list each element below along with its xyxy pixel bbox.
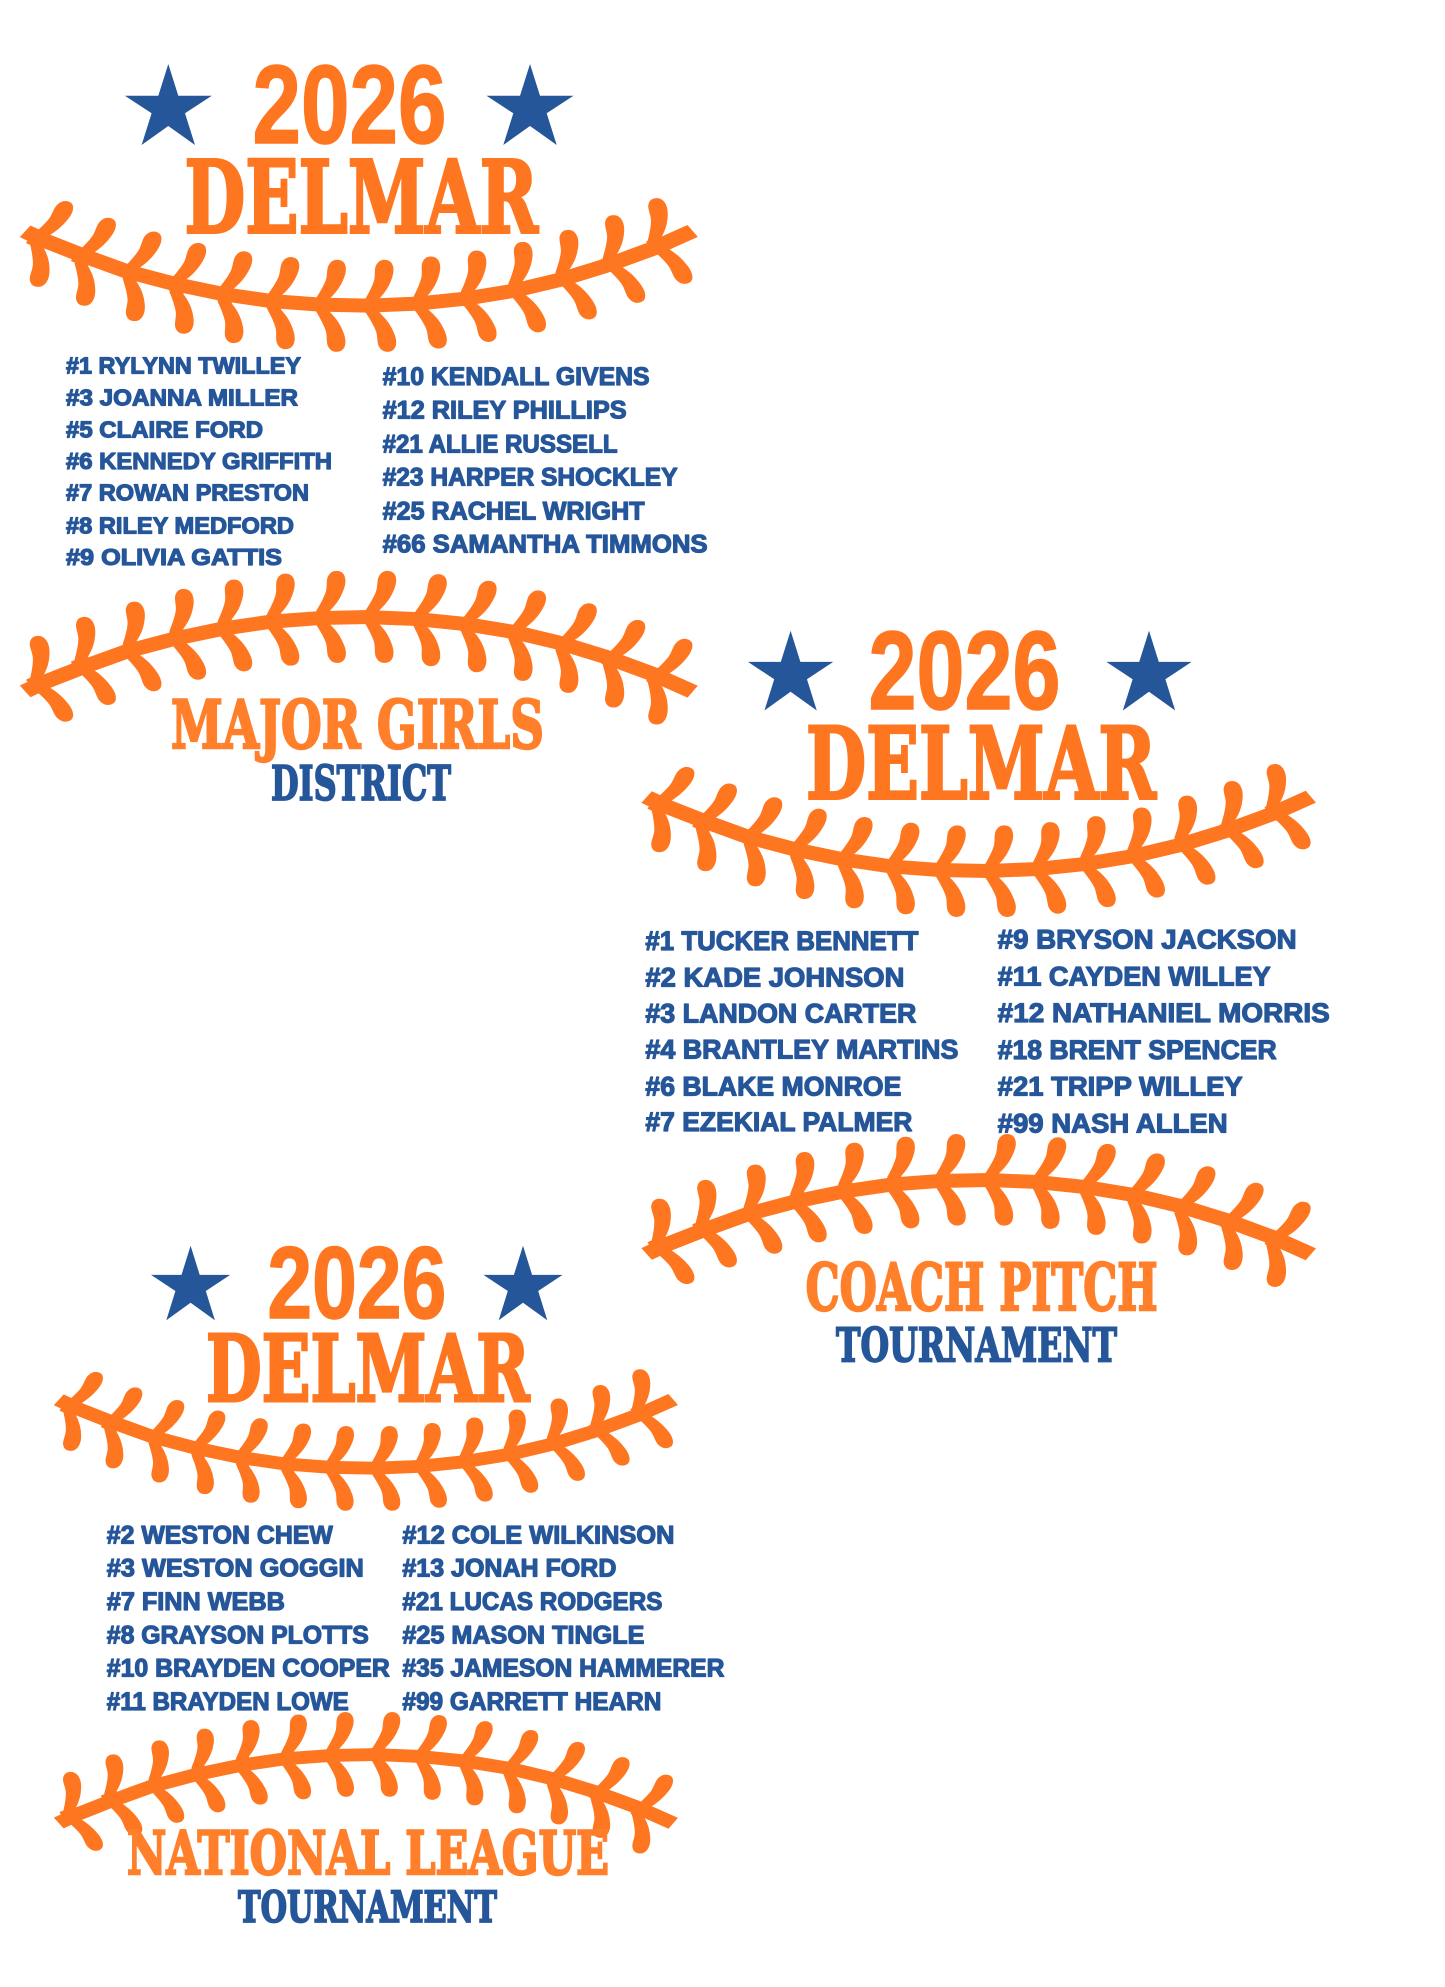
roster: right column [998,925,1330,1139]
panel: national league tournament [59,1226,724,1933]
team heading: DELMAR [806,706,1157,822]
icon: right star [1106,631,1192,710]
roster: left column: #7 EZEKIAL PALMER [645,1107,912,1137]
roster: left column: #8 RILEY MEDFORD [66,512,294,538]
roster: right column: #23 HARPER SHOCKLEY [383,464,678,492]
roster: right column: #18 BRENT SPENCER [998,1035,1277,1065]
panel: major girls district [25,43,708,812]
roster: left column: #11 BRAYDEN LOWE [107,1688,349,1716]
event label: DISTRICT [271,756,451,812]
roster: right column: #25 RACHEL WRIGHT [383,497,645,525]
panel: coach pitch tournament [645,609,1330,1374]
roster: right column: #13 JONAH FORD [402,1555,616,1583]
roster: left column: #10 BRAYDEN COOPER [107,1655,390,1683]
baseball seam: top [647,765,1314,917]
roster: left column: #6 BLAKE MONROE [645,1071,901,1101]
roster: left column: #6 KENNEDY GRIFFITH [66,448,332,474]
roster: right column: #99 GARRETT HEARN [402,1688,661,1716]
year heading: 2026 [252,43,446,167]
roster: right column: #99 NASH ALLEN [998,1109,1228,1139]
roster: left column: #2 WESTON CHEW [107,1521,333,1549]
roster: right column: #12 NATHANIEL MORRIS [998,998,1330,1028]
roster: right column: #66 SAMANTHA TIMMONS [383,531,708,559]
icon: left star [125,64,212,145]
baseball seam: bottom [25,571,696,723]
roster: left column: #5 CLAIRE FORD [66,416,263,442]
roster: right column: #12 RILEY PHILLIPS [383,397,627,425]
roster: right column [402,1521,724,1716]
division heading: MAJOR GIRLS [171,686,544,764]
year heading: 2026 [267,1226,446,1340]
roster: left column: #8 GRAYSON PLOTTS [107,1621,369,1649]
roster: left column: #3 LANDON CARTER [645,999,916,1029]
roster: left column: #2 KADE JOHNSON [645,962,904,992]
roster: left column [645,926,958,1137]
roster: right column [383,363,708,559]
roster: right column: #10 KENDALL GIVENS [383,363,650,391]
roster: right column: #12 COLE WILKINSON [402,1521,674,1549]
roster: right column: #21 TRIPP WILLEY [998,1071,1243,1101]
icon: left star [151,1246,230,1320]
team heading: DELMAR [184,138,539,256]
roster: left column: #9 OLIVIA GATTIS [66,544,282,570]
roster: right column: #11 CAYDEN WILLEY [998,961,1271,991]
icon: right star [483,1246,563,1320]
year heading: 2026 [868,609,1060,733]
event label: TOURNAMENT [238,1883,497,1933]
roster: left column: #7 FINN WEBB [107,1588,285,1616]
roster: right column: #9 BRYSON JACKSON [998,925,1297,955]
baseball seam: top [25,199,696,352]
roster: left column: #1 TUCKER BENNETT [645,926,919,956]
roster: left column: #1 RYLYNN TWILLEY [66,352,301,378]
roster: right column: #21 LUCAS RODGERS [402,1588,662,1616]
roster: left column: #3 JOANNA MILLER [66,384,298,410]
team heading: DELMAR [206,1315,530,1423]
baseball seam: bottom [647,1134,1314,1286]
roster: right column: #35 JAMESON HAMMERER [402,1655,724,1683]
roster: left column: #7 ROWAN PRESTON [66,480,309,506]
roster: left column: #3 WESTON GOGGIN [107,1555,364,1583]
icon: left star [748,631,833,710]
roster: right column: #25 MASON TINGLE [402,1621,644,1649]
event label: TOURNAMENT [836,1318,1117,1374]
baseball seam: top [59,1370,676,1511]
icon: right star [486,64,574,145]
division heading: NATIONAL LEAGUE [127,1819,609,1889]
roster: right column: #21 ALLIE RUSSELL [383,431,618,459]
division heading: COACH PITCH [806,1250,1158,1326]
roster: left column [107,1521,390,1716]
baseball seam: bottom [59,1712,676,1852]
roster: left column: #4 BRANTLEY MARTINS [645,1035,958,1065]
roster: left column [66,352,332,570]
